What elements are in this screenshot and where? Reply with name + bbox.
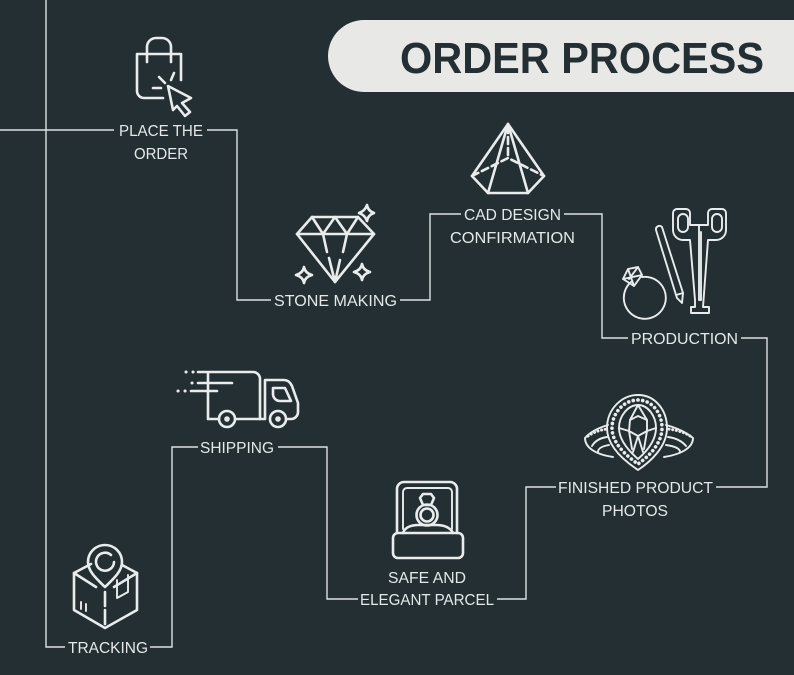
icon: delivery truck [178, 372, 298, 427]
icon: diamond with sparkles [296, 205, 374, 283]
label: place the order: ORDER [134, 146, 188, 163]
label: cad design confirmation [450, 207, 575, 247]
label: finished product photos: FINISHED PRODUCT [558, 480, 714, 497]
step: safe and elegant parcel [360, 482, 494, 609]
icon: ring, pencil and pliers [623, 209, 726, 319]
icon: halo pear ring [585, 395, 693, 470]
step: production [623, 209, 738, 348]
step: place the order [119, 38, 203, 163]
title banner [328, 20, 794, 92]
step: stone making [274, 205, 397, 310]
step: finished product photos [558, 395, 714, 520]
label: production: PRODUCTION [631, 331, 738, 348]
label: place the order: PLACE THE [119, 123, 203, 140]
label: safe and elegant parcel: SAFE AND [388, 570, 466, 587]
title banner: ORDER PROCESS [400, 34, 764, 83]
label: stone making: STONE MAKING [274, 293, 397, 310]
label: safe and elegant parcel: ELEGANT PARCEL [360, 592, 494, 609]
label: shipping: SHIPPING [200, 440, 274, 457]
step: tracking [68, 545, 148, 657]
label: safe and elegant parcel [360, 570, 494, 609]
step: shipping [178, 372, 298, 457]
icon: parcel with location pin [74, 545, 137, 628]
label: finished product photos [558, 480, 714, 520]
icon: wireframe gem [472, 124, 544, 193]
icon: ring box [393, 482, 463, 558]
label: cad design confirmation: CONFIRMATION [450, 230, 575, 247]
step: cad design confirmation [450, 124, 575, 247]
label: place the order [119, 123, 203, 163]
icon: shopping bag with cursor [137, 38, 191, 116]
label: tracking: TRACKING [68, 640, 148, 657]
label: finished product photos: PHOTOS [602, 503, 668, 520]
label: cad design confirmation: CAD DESIGN [464, 207, 561, 224]
